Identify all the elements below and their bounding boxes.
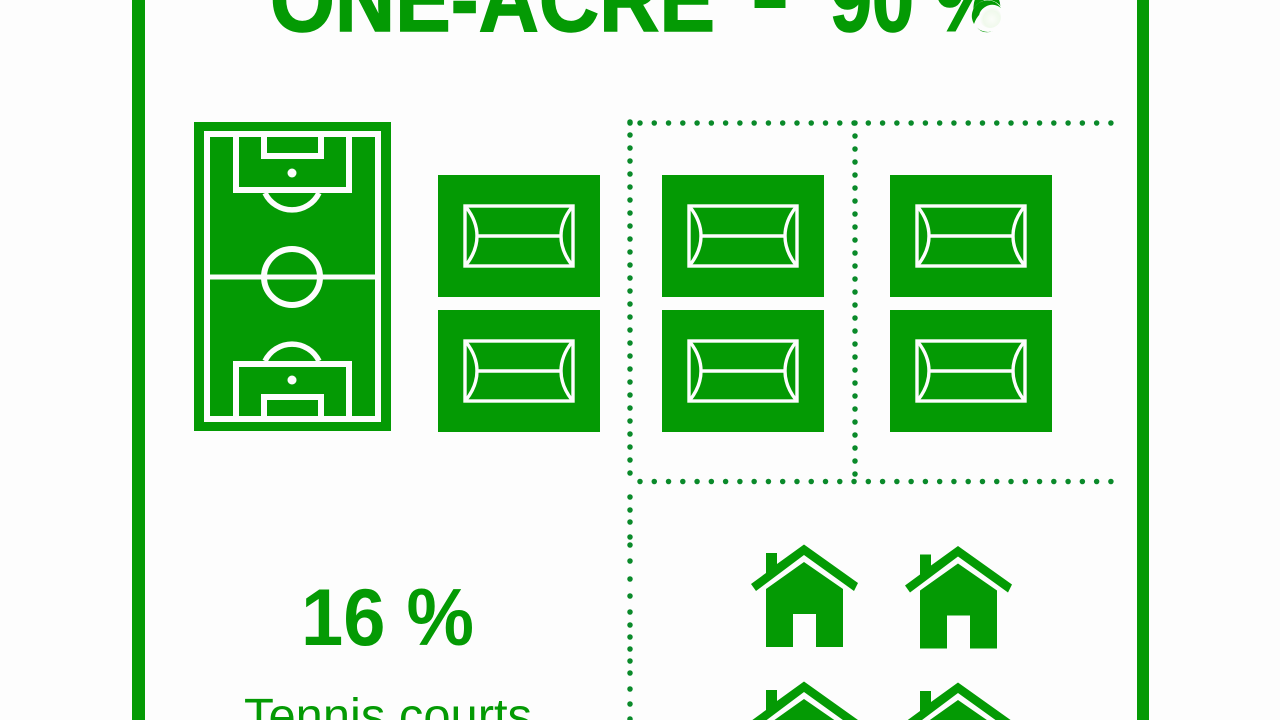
icon: tennis court 3 [662, 175, 824, 297]
icon: tennis court 5 [890, 175, 1052, 297]
icon: house 1 [751, 544, 858, 647]
icon: house 4 [905, 682, 1012, 720]
icon: house 2 [905, 546, 1012, 648]
stat: 16 %: 16 % [301, 573, 474, 663]
icon: tennis court 2 [438, 310, 600, 432]
dotted divider lines [630, 122, 1112, 719]
icon: house 3 [751, 682, 858, 720]
icon: tennis court 4 [662, 310, 824, 432]
title [270, 0, 1004, 51]
icon: tennis court 6 [890, 310, 1052, 432]
icon: tennis court 1 [438, 175, 600, 297]
panel frame [132, 0, 1149, 720]
icon: soccer pitch [194, 122, 391, 431]
